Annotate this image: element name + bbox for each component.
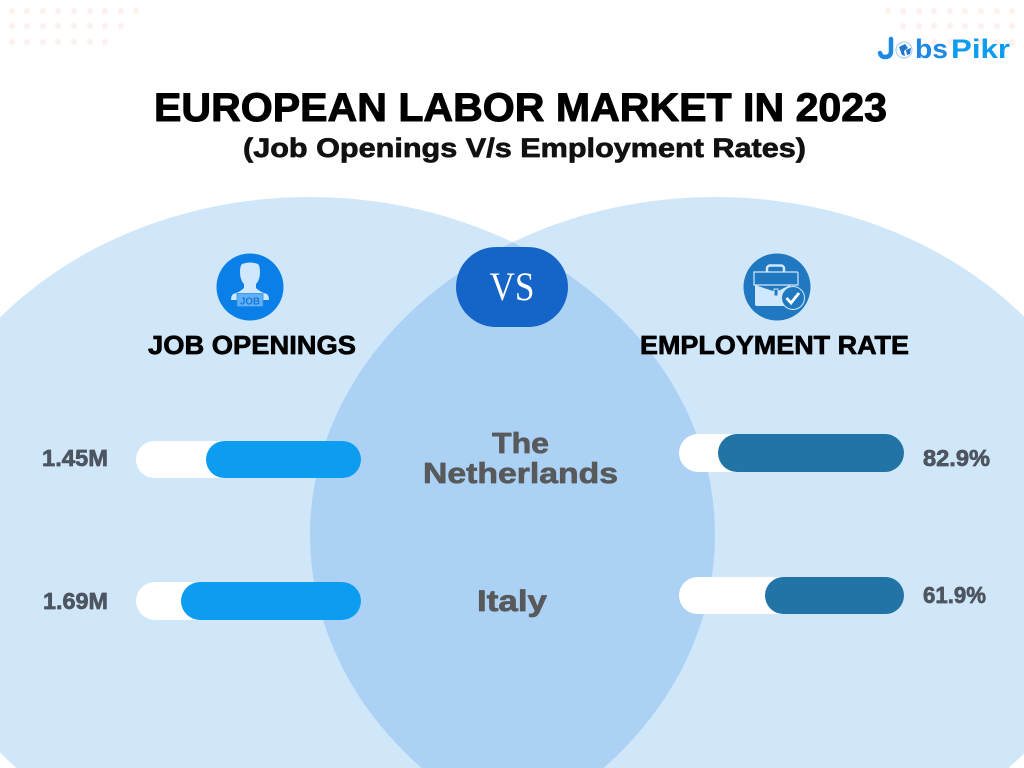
subtitle: (Job Openings V/s Employment Rates)	[243, 133, 806, 163]
heading: job openings: JOB OPENINGS	[148, 330, 356, 360]
bar: Netherlands employment rate 82.9%	[679, 434, 990, 472]
bar: Italy employment rate 61.9%: 61.9%	[923, 582, 986, 608]
heading: employment rate: EMPLOYMENT RATE	[640, 330, 909, 360]
bar: Italy job openings 1.69M: 1.69M	[43, 588, 108, 614]
venn diagram background	[0, 197, 1024, 768]
label: The Netherlands	[423, 428, 618, 490]
icon: briefcase with check	[744, 254, 810, 320]
label: The Netherlands: Netherlands	[423, 458, 618, 490]
vs badge	[456, 247, 568, 327]
bar: Italy employment rate 61.9%	[679, 577, 986, 614]
logo: JobsPikr: Pikr	[951, 34, 1011, 64]
bar: Netherlands job openings 1.45M	[42, 441, 361, 478]
label: The Netherlands: The	[492, 428, 549, 460]
bar: Netherlands job openings 1.45M: 1.45M	[42, 445, 108, 471]
icon: job seeker: JOB	[240, 296, 260, 308]
bar: Italy job openings 1.69M	[43, 582, 361, 620]
title: EUROPEAN LABOR MARKET IN 2023	[154, 86, 887, 130]
label: Italy: Italy	[477, 585, 547, 618]
vs badge: VS	[490, 264, 534, 309]
icon: job seeker	[216, 254, 284, 320]
logo: JobsPikr	[880, 34, 1011, 64]
logo: JobsPikr: bs	[915, 34, 948, 64]
bar: Netherlands employment rate 82.9%: 82.9%	[923, 445, 990, 471]
